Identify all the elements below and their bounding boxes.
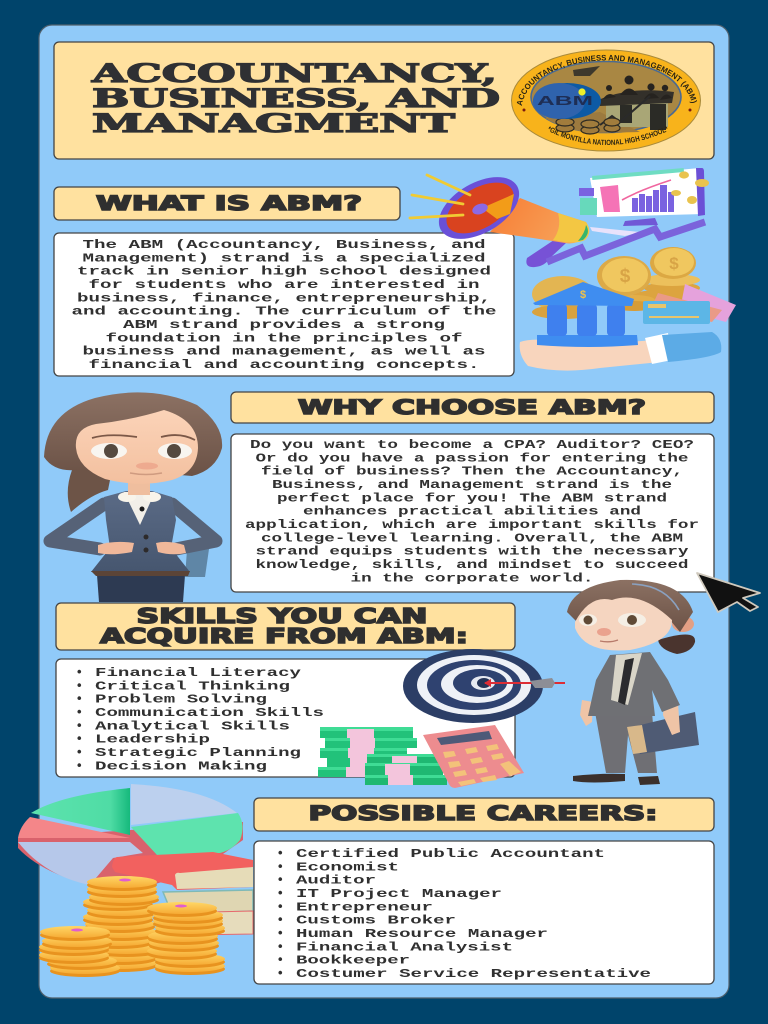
icon: coins, bank and hand: $	[669, 254, 679, 273]
text block: why choose ABM: strand equips students with the necessary	[256, 546, 689, 559]
text block: why choose ABM: knowledge, skills, and mindset to succeed	[256, 559, 689, 572]
icon: stacks of cash	[318, 727, 447, 785]
list: skills: Decision Making	[95, 760, 267, 773]
text block: why choose ABM: Business, and Management strand is the	[272, 479, 672, 492]
heading: why choose ABM	[231, 392, 714, 423]
list: possible careers: Human Resource Manager	[296, 928, 548, 941]
list: possible careers: Entrepreneur	[296, 901, 433, 914]
list: skills: •	[77, 717, 82, 732]
icon: stacks of gold coins	[39, 876, 225, 977]
text block: why choose ABM	[231, 434, 714, 592]
list: possible careers: •	[278, 858, 283, 873]
icon: coins, bank and hand	[520, 247, 736, 371]
text block: why choose ABM: Or do you have a passion for entering the	[256, 452, 689, 465]
text block: why choose ABM: Do you want to become a CPA? Auditor? CEO?	[250, 439, 694, 452]
text block: why choose ABM: enhances practical abilities and	[303, 506, 641, 519]
text block: what is ABM: Management) strand is a specialized	[82, 252, 486, 265]
list: skills: •	[77, 757, 82, 772]
list: possible careers: Financial Analysist	[296, 941, 513, 954]
title: ACCOUNTANCY,	[90, 59, 497, 89]
text block: what is ABM: and accounting. The curriculum of the	[72, 306, 497, 319]
list: skills: •	[77, 691, 82, 706]
list: possible careers	[254, 841, 714, 984]
title: MANAGMENT	[92, 109, 455, 139]
list: skills: Analytical Skills	[95, 720, 290, 733]
icon: calculator	[423, 725, 524, 788]
icon: dashboard monitor with rising arrow	[547, 168, 709, 262]
list: possible careers: Economist	[296, 861, 399, 874]
title: BUSINESS, AND	[92, 84, 500, 114]
list: skills: •	[77, 731, 82, 746]
text block: why choose ABM: application, which are important skills for	[245, 519, 699, 532]
logo: ABM strand seal	[511, 50, 701, 152]
title	[90, 59, 500, 139]
list: possible careers: •	[278, 952, 283, 967]
heading: skills: ACQUIRE FROM ABM:	[100, 624, 468, 648]
list: possible careers: •	[278, 845, 283, 860]
list: skills: Communication Skills	[95, 707, 324, 720]
text block: what is ABM: The ABM (Accountancy, Business, and	[82, 239, 486, 252]
list: possible careers: Bookkeeper	[296, 955, 410, 968]
list: possible careers: •	[278, 938, 283, 953]
logo: ABM strand seal: ABM	[537, 93, 593, 108]
list: skills: •	[77, 704, 82, 719]
list: possible careers: IT Project Manager	[296, 888, 502, 901]
text block: what is ABM: ABM strand provides a strong	[123, 319, 445, 332]
illustration: businesswoman with folder	[567, 580, 699, 785]
list: possible careers: •	[278, 965, 283, 980]
icon: books	[112, 852, 253, 935]
icon: megaphone	[410, 164, 589, 267]
list: skills: Leadership	[95, 734, 210, 747]
text block: what is ABM: track in senior high school designed	[77, 266, 491, 279]
heading: possible careers	[254, 798, 714, 831]
text block: what is ABM: business, finance, entrepreneurship,	[77, 292, 491, 305]
illustration: businesswoman with hands on hips	[44, 392, 222, 602]
list: skills: •	[77, 677, 82, 692]
list: possible careers: •	[278, 925, 283, 940]
list: possible careers: Costumer Service Representative	[296, 968, 651, 981]
list: skills: Strategic Planning	[95, 747, 301, 760]
heading: possible careers: POSSIBLE CAREERS:	[308, 802, 658, 825]
text block: why choose ABM: college-level learning. Overall, the ABM	[261, 532, 683, 545]
heading: what is ABM: WHAT IS ABM?	[96, 192, 362, 215]
text block: what is ABM: business and management, as well as	[82, 346, 486, 359]
heading: skills	[56, 603, 515, 650]
list: possible careers: •	[278, 872, 283, 887]
logo: ABM strand seal: *GIL MONTILLA NATIONAL HIGH SCHOOL*	[548, 126, 668, 145]
list: possible careers: Auditor	[296, 875, 376, 888]
list: skills: Financial Literacy	[95, 667, 301, 680]
list: possible careers: Certified Public Accountant	[296, 848, 605, 861]
heading: why choose ABM: WHY CHOOSE ABM?	[298, 396, 646, 419]
text block: what is ABM: financial and accounting concepts.	[88, 359, 480, 372]
list: skills: Critical Thinking	[95, 680, 290, 693]
list: possible careers: •	[278, 885, 283, 900]
text block: what is ABM: foundation in the principles of	[106, 332, 463, 345]
list: skills: •	[77, 664, 82, 679]
text block: why choose ABM: field of business? Then the Accountancy,	[261, 466, 683, 479]
list: skills: •	[77, 744, 82, 759]
text block: what is ABM	[54, 233, 514, 376]
text block: why choose ABM: in the corporate world.	[350, 572, 594, 585]
icon: target with arrow	[403, 649, 565, 723]
icon: coins, bank and hand: $	[580, 289, 586, 301]
list: skills: Problem Solving	[95, 694, 267, 707]
list: skills	[56, 659, 515, 777]
chart: pie	[18, 784, 243, 892]
icon: coins, bank and hand: $	[620, 266, 631, 287]
heading: what is ABM	[54, 187, 400, 220]
title panel	[53, 41, 715, 160]
list: possible careers: Customs Broker	[296, 915, 456, 928]
icon: computer cursor	[697, 573, 760, 612]
list: possible careers: •	[278, 912, 283, 927]
heading: skills: SKILLS YOU CAN	[136, 604, 428, 628]
list: possible careers: •	[278, 898, 283, 913]
text block: what is ABM: for students who are interested in	[88, 279, 480, 292]
text block: why choose ABM: perfect place for you! The ABM strand	[277, 492, 667, 505]
